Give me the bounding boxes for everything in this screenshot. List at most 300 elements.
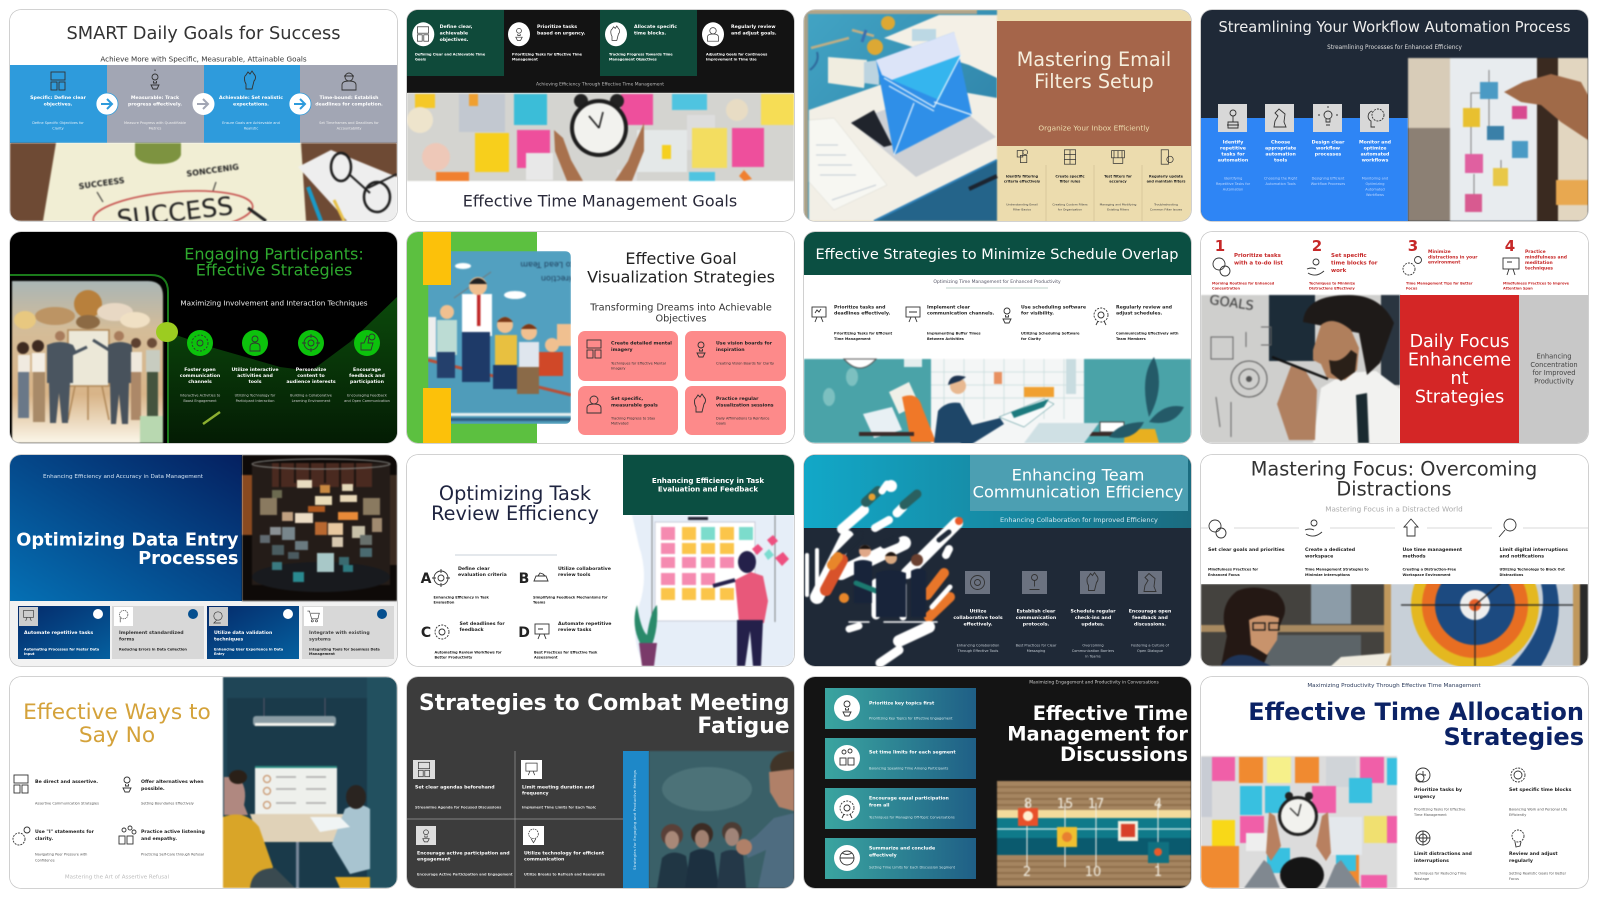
tips: Focus	[1509, 877, 1519, 881]
visualization cards: Tracking Progress to Stay	[610, 417, 655, 421]
strategy grid: communication	[524, 857, 565, 863]
strategies: Communicating Effectively with	[1116, 332, 1179, 336]
footer note: Mastering the Art of Assertive Refusal	[65, 875, 170, 881]
discussion tips: Set time limits for each segment	[869, 750, 956, 756]
numbered steps: mindfulness and	[1525, 255, 1567, 261]
visualization cards: Imagery	[611, 367, 626, 371]
tips	[13, 775, 205, 863]
tips: Setting Boundaries Effectively	[141, 802, 194, 806]
numbered steps: distractions in your	[1428, 255, 1478, 261]
goal columns: Set Timeframes and Deadlines for	[319, 121, 380, 125]
goal columns: Regularly review	[731, 24, 776, 30]
communication points: collaborative tools	[953, 615, 1003, 621]
photo: team at flip chart	[12, 281, 163, 443]
title: Effective Time	[1033, 702, 1188, 725]
tips: possible.	[141, 786, 165, 792]
tips: Navigating Peer Pressure with	[35, 853, 88, 857]
engagement points: tools	[249, 379, 262, 385]
communication points: protocols.	[1023, 621, 1049, 627]
feature cards: Integrate with existing	[309, 630, 370, 636]
strategies: Team Members	[1116, 337, 1146, 341]
communication points: Establish clear	[1017, 609, 1056, 615]
goal columns	[407, 10, 794, 93]
goal columns: Prioritize tasks	[537, 24, 577, 30]
review steps: B	[519, 571, 530, 587]
title: Effective Ways to	[23, 700, 211, 725]
title: Fatigue	[698, 714, 790, 739]
numbered steps	[1212, 237, 1570, 291]
strategy grid: Encourage active participation and	[417, 851, 510, 857]
steps: Time Management Strategies to	[1305, 567, 1369, 571]
strategy grid	[413, 760, 606, 877]
subtitle: Objectives	[656, 314, 707, 325]
goal columns: Ensure Goals are Achievable and	[222, 121, 280, 125]
goal columns: Specific: Define clear	[30, 95, 87, 101]
panel: Mastering Email Filters Setup	[804, 10, 1191, 221]
subtitle block: Productivity	[1534, 378, 1574, 386]
communication points: in Teams	[1085, 654, 1101, 658]
strategies: for Clarity	[1021, 337, 1042, 341]
feature cards: forms	[119, 636, 135, 642]
panel: Effective Goal Visualization	[407, 232, 794, 443]
panel: Effective Ways to Say No	[10, 677, 397, 888]
title: Strategies to Combat Meeting	[419, 691, 790, 716]
panel: Streamlining Workflow Automation	[1201, 10, 1588, 221]
title: Effective Strategies	[196, 261, 352, 280]
communication points: effectively.	[963, 621, 993, 627]
steps	[1004, 150, 1185, 221]
review steps: review tasks	[558, 627, 592, 633]
timeline image: 15	[1057, 797, 1073, 812]
review steps: Evaluation	[434, 600, 455, 604]
step cards: repetitive	[1220, 146, 1246, 152]
strategies: Regularly review and	[1116, 305, 1172, 311]
review steps: evaluation criteria	[458, 572, 507, 578]
caption: Maximizing Engagement and Productivity in Conversations	[1029, 680, 1159, 686]
step cards: Identify	[1223, 140, 1243, 146]
step cards: Monitor and	[1359, 140, 1391, 146]
goal columns: Management	[512, 57, 538, 61]
illustration: business team and stripes	[807, 480, 963, 663]
title block	[997, 21, 1191, 146]
title block	[10, 455, 242, 601]
goal columns: Accountability	[337, 127, 362, 131]
tips: Prioritizing Tasks for Effective	[1414, 808, 1465, 812]
title: Effective Goal	[626, 249, 737, 268]
strategy grid: Limit meeting duration and	[522, 785, 595, 791]
subtitle: Mastering Focus in a Distracted World	[1325, 504, 1463, 513]
steps: Understanding Email	[1006, 202, 1038, 206]
goal columns: Define clear,	[440, 24, 473, 30]
discussion tips: Encourage equal participation	[869, 796, 949, 802]
visualization cards: imagery	[611, 347, 633, 353]
communication points: Open Dialogue	[1137, 649, 1163, 653]
subtitle: Maximizing Involvement and Interaction Techniques	[181, 299, 368, 308]
goal columns: expectations.	[233, 101, 269, 107]
strategy grid: frequency	[522, 791, 549, 797]
tips: Practicing Self-Care through Refusal	[141, 853, 204, 857]
engagement points: Building a Collaborative	[290, 394, 332, 398]
strategies: communication channels.	[927, 311, 995, 317]
feature cards: Input	[24, 652, 35, 656]
title: Effective Time Allocation	[1248, 698, 1584, 726]
goal columns: Improvement in Time Use	[706, 57, 757, 61]
visualization cards: inspiration	[716, 347, 745, 353]
title: SMART Daily Goals for Success	[67, 23, 341, 44]
panel: Combat Meeting Fatigue	[407, 677, 794, 888]
subtitle: Enhancing Collaboration for Improved Efficiency	[1000, 516, 1158, 524]
feature cards: Entry	[214, 652, 225, 656]
review steps: feedback	[460, 627, 485, 633]
review steps: Teams	[533, 600, 546, 604]
numbered steps: Mindfulness Practices to Improve	[1503, 282, 1570, 286]
title: Strategies	[1443, 723, 1584, 751]
communication points: Overcoming	[1082, 643, 1104, 647]
tips: Confidence	[35, 859, 55, 863]
steps: filter rules	[1060, 180, 1080, 184]
title box: Communication Efficiency	[973, 482, 1184, 502]
title: Engaging Participants:	[184, 245, 364, 264]
feature cards: systems	[309, 636, 331, 642]
visualization cards: visualization sessions	[716, 403, 774, 409]
title: Distractions	[1336, 478, 1452, 500]
title block: Enhancing Efficiency and Accuracy in Data Management	[43, 474, 204, 480]
goal columns: based on urgency.	[537, 31, 586, 37]
review steps: Best Practices for Effective Task	[534, 650, 598, 654]
numbered steps: Prioritize tasks	[1234, 253, 1282, 259]
title block: Organize Your Inbox Efficiently	[1038, 124, 1150, 132]
numbered steps: Attention Span	[1503, 287, 1533, 291]
goal columns: progress effectively.	[128, 101, 182, 107]
steps: Set clear goals and priorities	[1208, 547, 1285, 553]
review steps	[421, 566, 612, 659]
engagement points: channels	[188, 379, 212, 385]
communication points: updates.	[1081, 621, 1105, 627]
review steps: Automating Review Workflows for	[435, 650, 502, 654]
tips: Offer alternatives when	[141, 779, 204, 785]
subtitle: Achieve More with Specific, Measurable, Attainable Goals	[101, 54, 307, 64]
communication points: check-ins and	[1075, 615, 1111, 621]
goal columns: Tracking Progress Towards Time	[609, 52, 673, 56]
step cards: tools	[1274, 158, 1287, 164]
step cards: Choosing the Right	[1264, 176, 1298, 180]
strategies: Utilizing Scheduling Software	[1021, 332, 1080, 336]
steps: Managing and Modifying	[1100, 202, 1137, 206]
step cards: optimize	[1364, 146, 1386, 152]
panel: Enhancing Team Communication	[804, 455, 1191, 666]
arrows	[96, 93, 311, 115]
step cards: appropriate	[1265, 146, 1296, 152]
goal columns: Adjusting Goals for Continuous	[706, 52, 768, 56]
timeline image: 17	[1088, 797, 1104, 812]
discussion tips	[825, 688, 976, 879]
engagement points	[180, 330, 390, 403]
discussion tips: Balancing Speaking Time Among Participants	[869, 767, 949, 771]
goal columns: Realistic	[244, 127, 259, 131]
timeline image	[997, 781, 1191, 886]
steps: Create a dedicated	[1305, 547, 1355, 553]
photo: success notepad	[10, 143, 397, 241]
goal columns: Achievable: Set realistic	[219, 95, 283, 101]
red title block: Enhanceme	[1408, 351, 1511, 371]
numbered steps: Concentration	[1212, 287, 1240, 291]
feature cards: Automate repetitive tasks	[24, 630, 94, 636]
photo: clock with sticky notes	[1201, 756, 1397, 893]
feature cards: Enhancing User Experience in Data	[214, 647, 284, 651]
photo: meeting room	[223, 677, 397, 888]
step cards: Automated	[1365, 187, 1385, 191]
strategies: Between Activities	[927, 337, 964, 341]
title: Say No	[79, 723, 155, 748]
strategies: Implement clear	[927, 305, 971, 311]
numbered steps: Minimize	[1428, 249, 1451, 255]
strategies: deadlines effectively.	[834, 311, 890, 317]
title block: Filters Setup	[1034, 70, 1154, 93]
caption: Maximizing Productivity Through Effective Time Management	[1307, 683, 1481, 689]
step cards: Repetitive Tasks for	[1216, 182, 1251, 186]
step cards: automation	[1218, 158, 1248, 164]
visualization cards: Practice regular	[716, 396, 759, 402]
subtitle block: Concentration	[1530, 361, 1578, 369]
communication points: Best Practices for Clear	[1016, 643, 1057, 647]
steps: Test filters for	[1104, 174, 1132, 178]
title: Mastering Focus: Overcoming	[1251, 458, 1537, 480]
steps: Common Filter Issues	[1150, 207, 1183, 211]
visualization cards: Daily Affirmations to Reinforce	[716, 417, 770, 421]
photo: workflow on glass	[1408, 58, 1588, 221]
steps: Create specific	[1055, 174, 1085, 178]
review steps: C	[421, 625, 431, 641]
goal columns: Clarity	[52, 127, 64, 131]
panel: Effective Time Management Goals	[407, 10, 794, 221]
discussion tips: Prioritize key topics first	[869, 701, 935, 707]
engagement points: Encouraging Feedback	[347, 394, 388, 398]
engagement points: Encourage	[353, 367, 381, 373]
tips: Assertive Communication Strategies	[35, 802, 99, 806]
decorative frame	[10, 275, 220, 443]
timeline image: 2	[1023, 865, 1031, 880]
steps	[1201, 519, 1588, 577]
strategy grid: Streamline Agenda for Focused Discussions	[415, 806, 502, 810]
engagement points: feedback and	[349, 373, 385, 379]
communication points: Through Effective Tools	[957, 649, 998, 653]
tips: Practice active listening	[141, 829, 205, 835]
title block: Optimizing Data Entry	[16, 530, 239, 550]
tips: Efficiently	[1509, 813, 1526, 817]
tips: clarity.	[35, 836, 54, 842]
red title block: Daily Focus	[1410, 332, 1509, 352]
subtitle block: Enhancing	[1536, 353, 1572, 361]
title block: Processes	[138, 548, 239, 569]
discussion tips: effectively	[869, 853, 897, 859]
photo: success notepad: SUCCEESS	[78, 176, 126, 191]
engagement points: and Open Communication	[344, 399, 390, 403]
step cards: Design clear	[1312, 140, 1345, 146]
title: Visualization Strategies	[587, 268, 775, 287]
visualization cards: Use vision boards for	[716, 341, 773, 347]
title bar	[804, 232, 1191, 275]
step cards: workflow	[1316, 146, 1341, 152]
visualization cards: Motivated	[611, 422, 629, 426]
numbered steps: Focus	[1406, 287, 1417, 291]
subtitle block	[1519, 295, 1588, 443]
title bar: Effective Strategies to Minimize Schedule Overlap	[816, 247, 1178, 263]
visualization cards	[578, 331, 786, 435]
panel: Daily Focus Enhancement	[1201, 232, 1588, 443]
communication points: Messaging	[1027, 649, 1045, 653]
steps: workspace	[1305, 554, 1333, 560]
numbered steps: Practice	[1525, 249, 1546, 255]
steps: for Organization	[1058, 207, 1082, 211]
feature cards	[18, 606, 394, 659]
numbered steps: meditation	[1525, 260, 1553, 266]
numbered steps: Set specific	[1331, 253, 1367, 259]
steps: criteria effectively	[1004, 180, 1041, 184]
numbered steps: Time Management Tips for Better	[1406, 282, 1473, 286]
strategy grid: Utilize technology for efficient	[524, 851, 605, 857]
strategy grid: Encourage Active Participation and Engagement	[417, 873, 513, 877]
header box	[623, 455, 794, 515]
review steps: Enhancing Efficiency in Task	[434, 595, 490, 599]
strategies: Prioritize tasks and	[834, 305, 885, 311]
engagement points: Boost Engagement	[184, 399, 217, 403]
communication points: Communication Barriers	[1072, 649, 1114, 653]
discussion tips: Summarize and conclude	[869, 846, 935, 852]
panel: Mastering Focus	[1201, 455, 1588, 666]
goal columns: Defining Clear and Achievable Time	[415, 52, 486, 56]
communication points: communication	[1016, 615, 1056, 621]
illustration: team on a ramp: to Lead Team	[520, 260, 574, 269]
visualization cards: Set specific,	[611, 396, 644, 402]
feature cards: Utilize data validation	[214, 630, 273, 636]
strategy grid: Implement Time Limits for Each Topic	[522, 806, 596, 810]
tips: Balancing Work and Personal Life	[1509, 808, 1567, 812]
tips: interruptions	[1414, 858, 1449, 864]
title: Management for	[1007, 723, 1188, 746]
goal columns	[10, 65, 397, 143]
step cards: Automation	[1223, 187, 1243, 191]
header box: Enhancing Efficiency in Task	[652, 476, 765, 485]
tips: and empathy.	[141, 836, 177, 842]
step cards: Monitoring and	[1362, 176, 1388, 180]
goal columns: Management Objectives	[609, 57, 657, 61]
communication points: feedback and	[1132, 615, 1168, 621]
communication points: Schedule regular	[1070, 609, 1116, 615]
vertical caption strip: Strategies for Engaging and Productive Meetings	[632, 770, 637, 870]
discussion tips: Techniques for Managing Off-Topic Conversations	[868, 816, 955, 820]
illustration: review board	[632, 515, 794, 666]
steps: Workspace Environment	[1402, 573, 1451, 577]
steps: Distractions	[1500, 573, 1523, 577]
tips: regularly	[1509, 858, 1533, 864]
numbered steps: 4	[1505, 237, 1515, 255]
strategy grid: Set clear agendas beforehand	[415, 785, 495, 791]
tips: Set specific time blocks	[1509, 787, 1572, 793]
title: Streamlining Your Workflow Automation Process	[1218, 19, 1571, 36]
goal columns: Prioritizing Tasks for Effective Time	[512, 52, 583, 56]
strategies	[812, 305, 1179, 341]
illustration: team on a ramp	[428, 251, 577, 424]
steps: Minimize Interruptions	[1305, 573, 1350, 577]
goal columns: objectives.	[440, 37, 469, 43]
visualization cards: Techniques for Effective Mental	[610, 362, 666, 366]
communication points	[953, 571, 1171, 658]
review steps: Better Productivity	[435, 655, 473, 659]
tips: Review and adjust	[1509, 851, 1558, 857]
step cards: Identifying	[1224, 176, 1242, 180]
step cards: automated	[1361, 152, 1389, 158]
communication points: discussions.	[1134, 621, 1166, 627]
goal columns: Define Specific Objectives for	[32, 121, 85, 125]
panel: SMART Daily Goals	[10, 10, 397, 221]
numbered steps: 1	[1215, 237, 1225, 255]
step cards: automation	[1265, 152, 1296, 158]
timeline image: 8	[1024, 797, 1032, 812]
goal columns: Metrics	[149, 127, 162, 131]
tips: Setting Realistic Goals for Better	[1509, 872, 1567, 876]
engagement points: Interactive Activities to	[180, 394, 220, 398]
steps: and notifications	[1500, 554, 1544, 560]
numbered steps: work	[1331, 268, 1347, 274]
photo: man at whiteboard	[1201, 293, 1400, 444]
panel: Minimize Schedule Overlap	[804, 232, 1191, 443]
numbered steps: Distractions Effectively	[1309, 287, 1355, 291]
step cards: processes	[1315, 152, 1341, 158]
visualization cards: measurable goals	[611, 403, 658, 409]
engagement points: Participant Interaction	[236, 399, 275, 403]
strategy grid: engagement	[417, 857, 451, 863]
strategy grid: Utilize Breaks to Refresh and Reenergize	[524, 873, 606, 877]
goal columns: Allocate specific	[634, 24, 677, 30]
steps: Enhanced Focus	[1208, 573, 1240, 577]
steps: Existing Filters	[1107, 207, 1129, 211]
numbered steps: 2	[1312, 237, 1322, 255]
title: Discussions	[1060, 743, 1188, 766]
feature cards: Implement standardized	[119, 630, 184, 636]
numbered steps: Techniques to Minimize	[1309, 282, 1356, 286]
communication points: Utilize	[970, 609, 986, 615]
review steps: Simplifying Feedback Mechanisms for	[533, 595, 608, 599]
goal columns: Achieving Efficiency Through Effective Time Management	[536, 81, 664, 87]
review steps: Automate repetitive	[558, 621, 612, 627]
timeline image: 10	[1085, 865, 1101, 880]
tips: Wastage	[1414, 877, 1429, 881]
panel: Optimizing Task Review	[407, 455, 794, 666]
goal columns: Time-bound: Establish	[320, 95, 379, 101]
visualization cards: Create detailed mental	[611, 341, 672, 347]
goal columns: deadlines for completion.	[315, 101, 383, 107]
numbered steps: Morning Routines for Enhanced	[1212, 282, 1275, 286]
goal columns: objectives.	[44, 101, 73, 107]
numbered steps: time blocks for	[1331, 261, 1378, 267]
step cards: Designing Efficient	[1312, 176, 1345, 180]
timeline image: 4	[1154, 797, 1162, 812]
photo: data cylinder	[242, 455, 397, 601]
header box: Evaluation and Feedback	[658, 484, 759, 493]
panel: Time Management for Discussions	[804, 677, 1191, 888]
goal columns: and adjust goals.	[731, 31, 777, 37]
title box: Enhancing Team	[1012, 466, 1144, 484]
discussion tips: Prioritizing Key Topics for Effective Engagement	[869, 717, 953, 721]
numbered steps: environment	[1428, 260, 1461, 266]
review steps: Assessment	[534, 655, 558, 659]
visualization cards: Goals	[716, 422, 726, 426]
steps: methods	[1402, 554, 1426, 560]
engagement points: communication	[180, 373, 220, 379]
illustration: team on a ramp: Direction	[541, 274, 577, 283]
steps: and maintain filters	[1147, 180, 1185, 184]
communication points: Enhancing Collaboration	[957, 643, 999, 647]
